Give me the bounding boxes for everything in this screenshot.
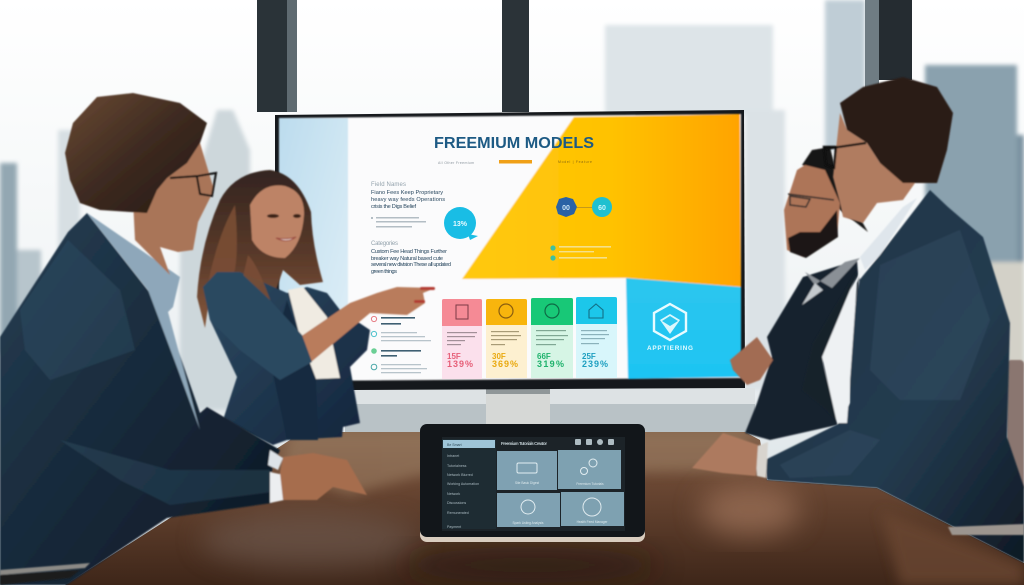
beard — [788, 210, 838, 258]
bottom left list — [371, 316, 431, 373]
suit highlights — [20, 240, 272, 505]
blouse — [288, 287, 340, 379]
fingernails — [414, 287, 435, 303]
face and neck — [833, 113, 915, 223]
card cyan: 239% — [582, 359, 608, 369]
tablet header: Freemium Tutorials Creator — [501, 441, 547, 446]
chair arms — [0, 524, 1024, 585]
hair — [65, 93, 207, 213]
left text block one — [371, 182, 445, 210]
hand on table — [692, 433, 758, 476]
face — [784, 165, 840, 257]
tablet body — [420, 426, 645, 542]
lower jacket fold — [270, 300, 318, 440]
flow badges on orange panel: 00 — [562, 205, 570, 212]
tablet sidebar: Intranet — [447, 454, 459, 458]
tablet tile: bottom left — [497, 493, 560, 527]
card green — [531, 298, 573, 378]
subtitle captions: Model | Feature — [558, 160, 592, 164]
tablet — [420, 424, 645, 542]
shirt — [87, 213, 200, 430]
card amber: 30F — [492, 352, 506, 361]
left text block two: several new division These all updated — [371, 262, 451, 268]
card pink — [442, 299, 482, 379]
left small bullet text — [371, 217, 426, 228]
glasses — [788, 194, 834, 207]
hair — [802, 147, 868, 232]
tablet tile: bottom right — [561, 492, 624, 526]
seated bearded man, right — [730, 147, 868, 440]
left text block two: Categories — [371, 241, 398, 247]
hair — [840, 77, 953, 183]
tablet sidebar: Tutorialness — [447, 464, 467, 468]
tablet sidebar: Network — [447, 492, 460, 496]
hair back — [197, 170, 323, 328]
tablet sidebar — [442, 439, 496, 529]
tablet sidebar: Remunerated — [447, 511, 469, 515]
card cyan: 25F — [582, 352, 596, 361]
eyes and smile — [267, 214, 301, 241]
flow badges on orange panel: 60 — [598, 205, 606, 212]
subtitle captions: All Other Freemium — [438, 161, 474, 165]
suit highlights — [780, 230, 990, 478]
watch and cuff — [755, 442, 768, 478]
cards row — [442, 297, 617, 379]
conference table — [60, 430, 1024, 585]
card green: 319% — [537, 359, 564, 369]
card pink: 139% — [447, 359, 473, 369]
left text block one: Field Names — [371, 182, 406, 188]
collar — [805, 258, 860, 288]
face — [250, 185, 304, 258]
pointing arm — [300, 287, 435, 363]
tablet tile: top right — [558, 450, 621, 489]
tablet sidebar: Be Smart — [447, 443, 462, 447]
left text block two — [371, 241, 451, 275]
chair back — [1007, 360, 1024, 490]
monitor — [275, 110, 745, 390]
white shirt — [822, 267, 863, 423]
left text block one: heavy way feeds Operations — [371, 197, 445, 203]
left text block one: crisis the Digs Belief — [371, 204, 416, 210]
seated man in profile, front right — [692, 77, 1024, 563]
orange panel — [462, 114, 741, 287]
hexagon logo: APPTIERING — [647, 345, 693, 352]
tablet tile: bottom right: Health Feed Manager — [577, 520, 608, 524]
tablet sidebar: Network Blurred — [447, 473, 473, 477]
title underline — [499, 160, 532, 164]
callout bubble 13% — [444, 207, 478, 240]
neck and face — [132, 143, 214, 275]
left text block two: Custom Fee Head Things Further — [371, 249, 447, 255]
hand — [730, 337, 773, 385]
cyan logo panel — [626, 278, 741, 379]
window ledge and monitor stand — [345, 388, 755, 434]
jacket sleeve — [203, 272, 312, 380]
window mullions — [257, 0, 912, 112]
cuffs — [268, 450, 283, 470]
tablet tile: top right: Freemium Tutorials — [576, 482, 604, 486]
tablet screen — [442, 437, 625, 531]
tablet tile: bottom left: Spark Listing Analysis — [512, 521, 544, 525]
card cyan — [576, 297, 617, 378]
seated man with glasses, left — [0, 93, 367, 585]
hair strands — [205, 205, 272, 305]
suit — [0, 213, 280, 585]
jacket — [745, 260, 860, 440]
title: FREEMIUM MODELS — [434, 135, 594, 152]
tablet sidebar: Payment — [447, 525, 461, 529]
subtitle captions — [438, 160, 592, 165]
glasses — [170, 173, 216, 196]
card amber: 369% — [492, 359, 518, 369]
card amber — [486, 299, 527, 378]
presenter woman — [197, 170, 435, 445]
tablet tile: top left — [497, 451, 557, 490]
tablet sidebar: Working Automation — [447, 482, 479, 486]
flow badges on orange panel — [556, 197, 612, 217]
orange panel checklist — [550, 245, 611, 261]
glasses — [824, 143, 866, 168]
card green: 66F — [537, 352, 551, 361]
jacket — [203, 272, 370, 445]
card pink: 15F — [447, 352, 461, 361]
callout bubble 13%: 13% — [453, 221, 468, 228]
tablet sidebar: Discussions — [447, 501, 466, 505]
hands — [280, 453, 367, 500]
suit — [765, 190, 1024, 563]
left text block two: breaker way Natural based cute — [371, 256, 443, 262]
hexagon logo — [647, 304, 693, 352]
left text block two: green things — [371, 269, 397, 275]
monitor screen — [279, 114, 741, 381]
monitor bezel — [275, 110, 745, 390]
tablet tile: top left: Site Basic Digest — [515, 481, 539, 485]
left text block one: Fiano Fees Keep Proprietary — [371, 190, 443, 196]
tablet header — [501, 439, 614, 446]
jacket left flap — [802, 270, 857, 425]
